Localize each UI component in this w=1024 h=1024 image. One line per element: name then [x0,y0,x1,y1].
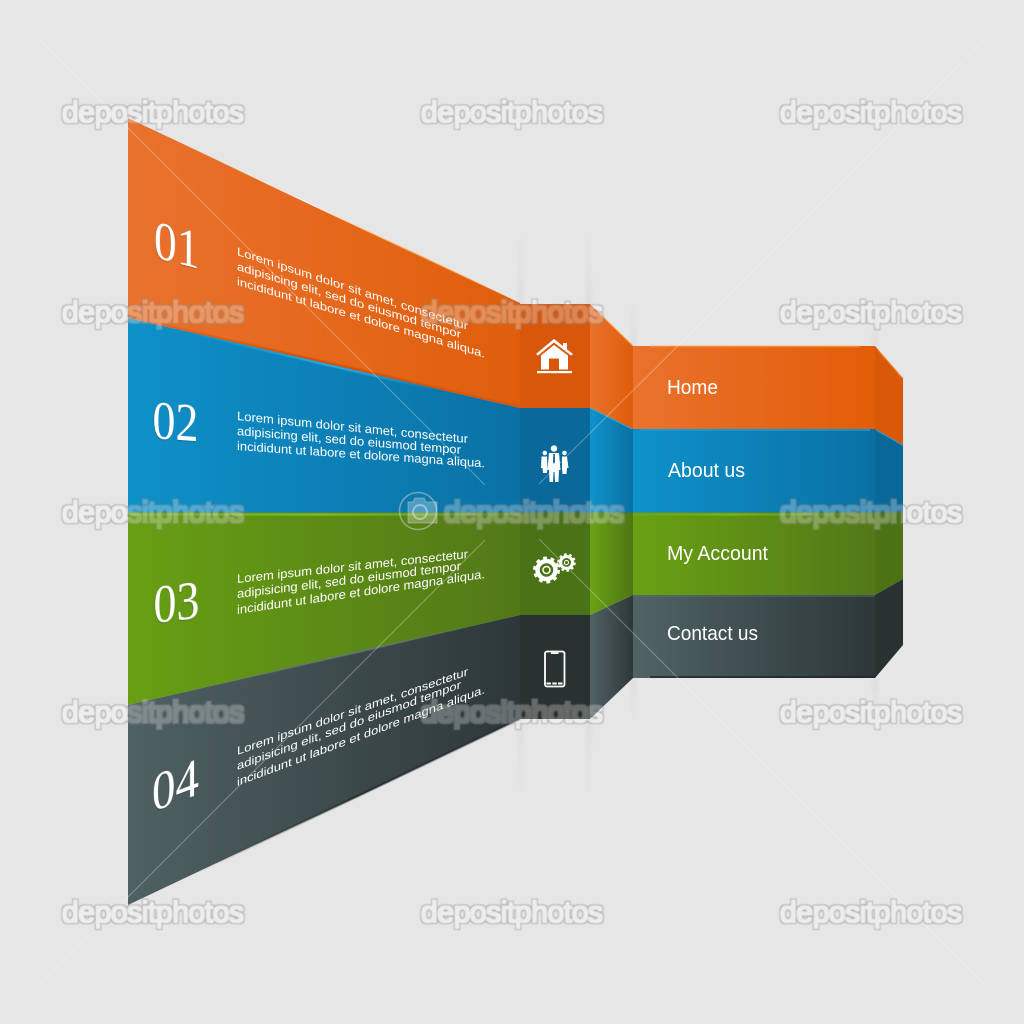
watermark row 4: depositphotos [421,696,603,729]
menu label: Contact us: Contact us [667,623,758,645]
text block 03: incididunt ut labore et dolore magna aliqua. [237,566,485,617]
watermark row 2 [62,296,962,329]
heading number 01: 01 [154,209,199,281]
text block 02: incididunt ut labore et dolore magna aliqua. [237,439,485,470]
watermark row 3 [62,496,962,529]
icon: gears [534,554,574,582]
watermark row 3: depositphotos [780,496,962,529]
watermark row 5: depositphotos [62,896,244,929]
menu label: Home: Home [667,377,718,399]
heading number 04: 04 [152,748,199,824]
watermark row 1 [62,96,962,129]
watermark row 4: depositphotos [62,696,244,729]
watermark row 2: depositphotos [62,296,244,329]
green left panel [128,512,520,705]
watermark row 5 [62,896,962,929]
heading number 03: 03 [154,569,199,635]
text block 03: adipisicing elit, sed do eiusmod tempor [237,558,462,601]
text block 01: adipisicing elit, sed do eiusmod tempor [237,260,461,341]
watermark row 5: depositphotos [780,896,962,929]
text block 01: Lorem ipsum dolor sit amet, consectetur [237,245,468,333]
watermark row 1: depositphotos [780,96,962,129]
watermark camera icon [400,492,437,530]
watermark row 2: depositphotos [780,296,962,329]
text block 04: incididunt ut labore et dolore magna aliqua. [237,682,485,789]
menu label: About us: About us [668,460,745,482]
menu label: My Account: My Account [667,543,768,565]
text block 04: Lorem ipsum dolor sit amet, consectetur [237,665,468,758]
watermark row 2: depositphotos [421,296,603,329]
text block 01: incididunt ut labore et dolore magna aliqua. [237,275,485,360]
watermark row 3: depositphotos [62,496,244,529]
panel: green ribbon [128,512,903,705]
icon: smartphone [545,652,564,686]
watermark row 3: depositphotos [444,496,624,529]
text block 04: adipisicing elit, sed do eiusmod tempor [237,678,462,773]
watermark row 4: depositphotos [780,696,962,729]
watermark row 5: depositphotos [421,896,603,929]
heading number 02: 02 [152,390,198,453]
fold shadows behind the ribbon [518,232,878,796]
panel: dark ribbon [128,579,903,905]
dark left panel [128,615,520,905]
panel: orange ribbon [128,118,903,445]
watermark row 4 [62,696,962,729]
text block 02 [237,408,485,470]
panel: blue ribbon [128,318,903,512]
text block 02: Lorem ipsum dolor sit amet, consectetur [237,408,469,446]
icon: house [536,339,573,373]
orange left panel [128,118,520,408]
blue left panel [128,318,520,512]
text block 03: Lorem ipsum dolor sit amet, consectetur [237,546,469,586]
text block 02: adipisicing elit, sed do eiusmod tempor [237,424,462,457]
watermark row 1: depositphotos [421,96,603,129]
watermark row 1: depositphotos [62,96,244,129]
icon: people [541,445,568,482]
